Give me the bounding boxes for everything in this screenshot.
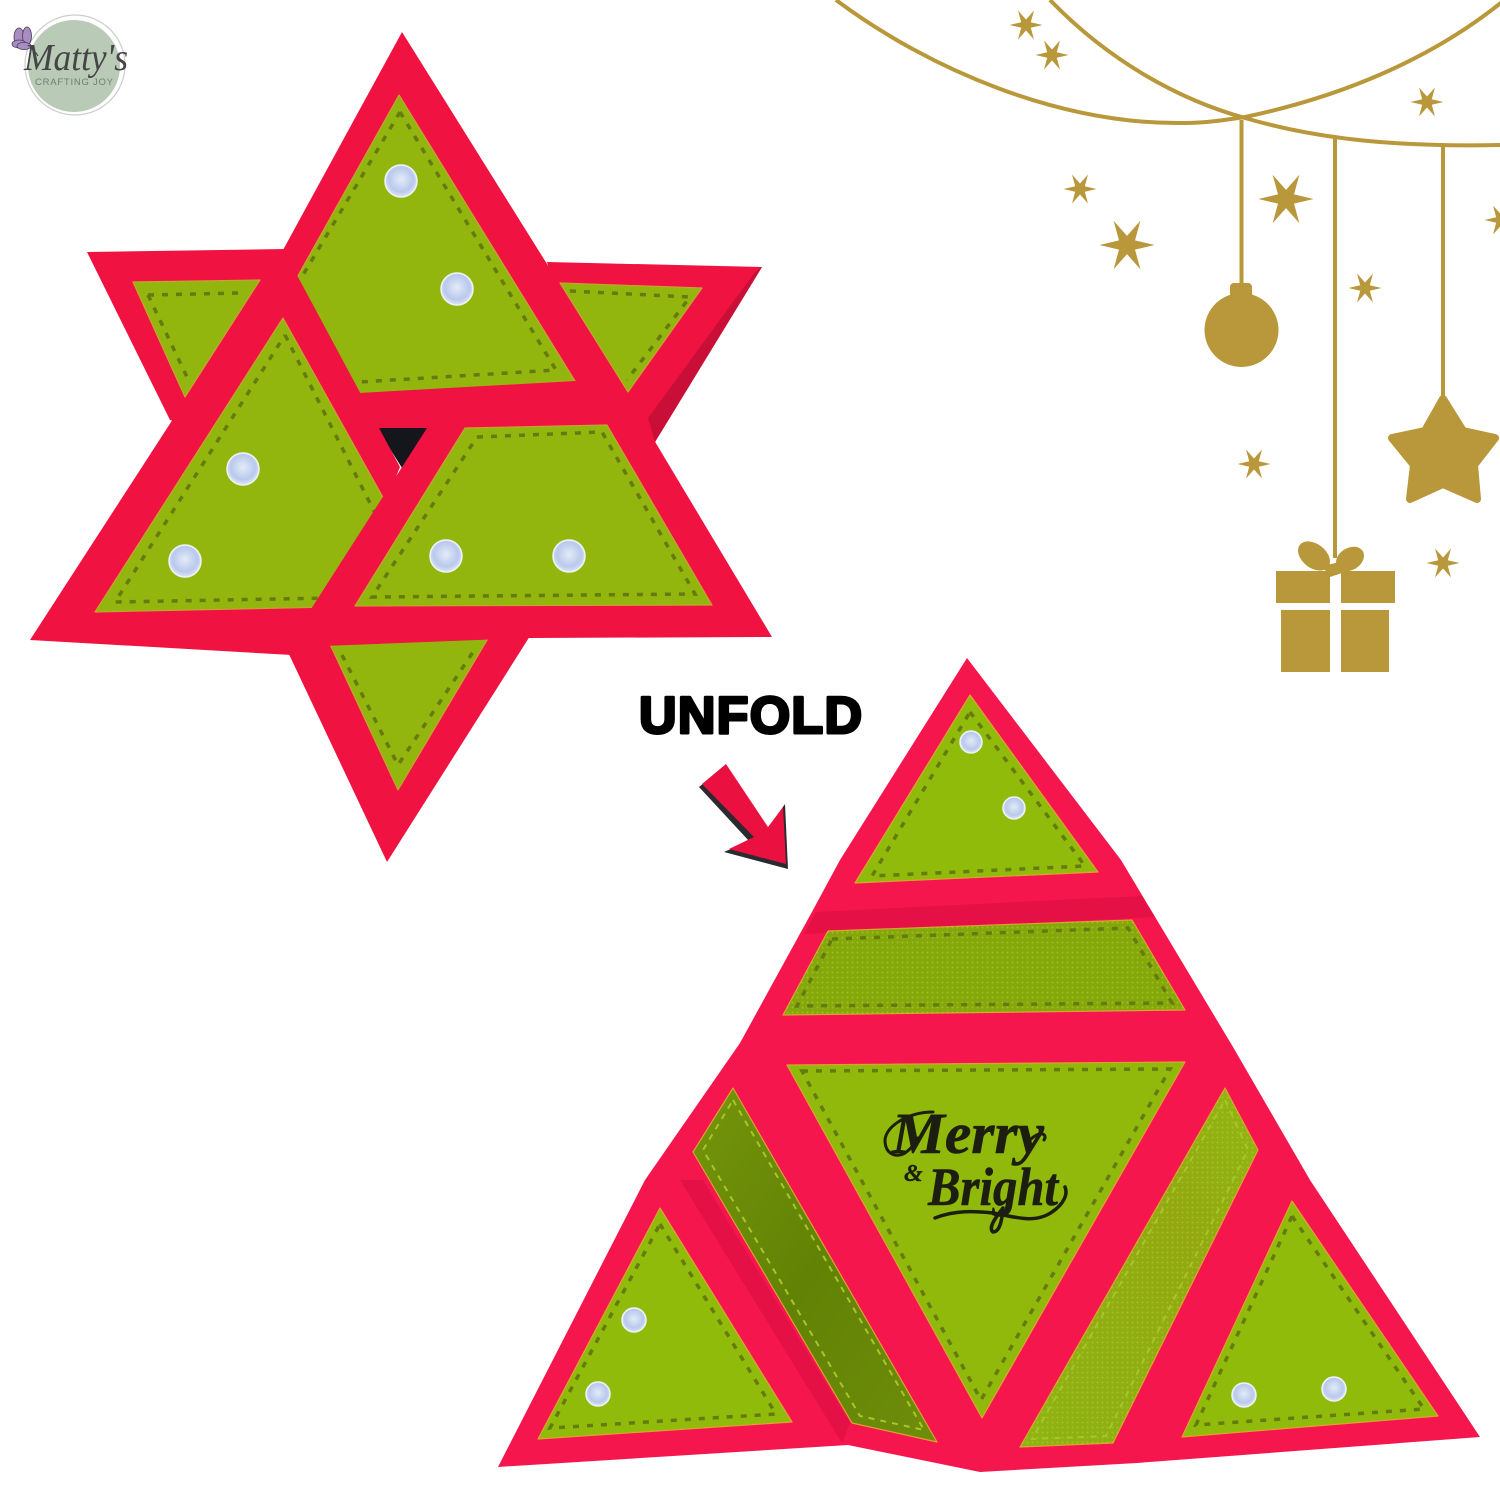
top triangle band overlapping right triangle xyxy=(359,381,642,428)
back left triangle xyxy=(87,249,400,425)
centre panel with sentiment xyxy=(787,1062,1185,1418)
right strip panel xyxy=(1020,1088,1258,1447)
upper band panel xyxy=(783,920,1185,1015)
logo: Matty's Crafting Joy: Matty's xyxy=(23,37,128,79)
sentiment: Merry & Bright: & xyxy=(904,1161,923,1187)
decoration: hanging star xyxy=(1392,146,1495,499)
top triangle xyxy=(283,32,642,428)
decoration: gold garland strings xyxy=(836,0,1500,145)
dark gap at the centre xyxy=(372,420,440,468)
gems on top triangle xyxy=(385,165,473,305)
fold shading xyxy=(680,896,1155,1443)
decoration: hanging gift box xyxy=(1276,138,1395,672)
bottom left triangle panel xyxy=(538,1208,792,1439)
back bottom triangle xyxy=(285,630,530,862)
folded star card xyxy=(30,32,772,862)
heading: UNFOLD: UNFOLD xyxy=(639,687,862,745)
top triangle panel xyxy=(855,695,1098,883)
left strip panel xyxy=(693,1088,937,1442)
bottom right triangle panel xyxy=(1182,1201,1438,1437)
unfolded triangle card xyxy=(498,658,1480,1472)
back right triangle xyxy=(547,262,762,442)
logo: Matty's Crafting Joy: CRAFTING JOY xyxy=(35,77,114,88)
card base xyxy=(498,658,1480,1472)
sentiment: Merry & Bright: Merry xyxy=(891,1101,1044,1166)
sentiment: Merry & Bright xyxy=(885,1101,1066,1232)
decoration: hanging bauble xyxy=(1204,120,1278,367)
right triangle xyxy=(288,405,772,647)
logo: Matty's Crafting Joy xyxy=(12,15,128,115)
left triangle xyxy=(30,249,400,655)
arrow pointing to the unfolded card xyxy=(699,764,788,869)
gems on left triangle xyxy=(169,453,259,577)
sentiment: Merry & Bright: Bright xyxy=(927,1157,1060,1217)
gems on right triangle xyxy=(430,540,585,572)
decoration: scattered gold stars xyxy=(1010,10,1500,578)
